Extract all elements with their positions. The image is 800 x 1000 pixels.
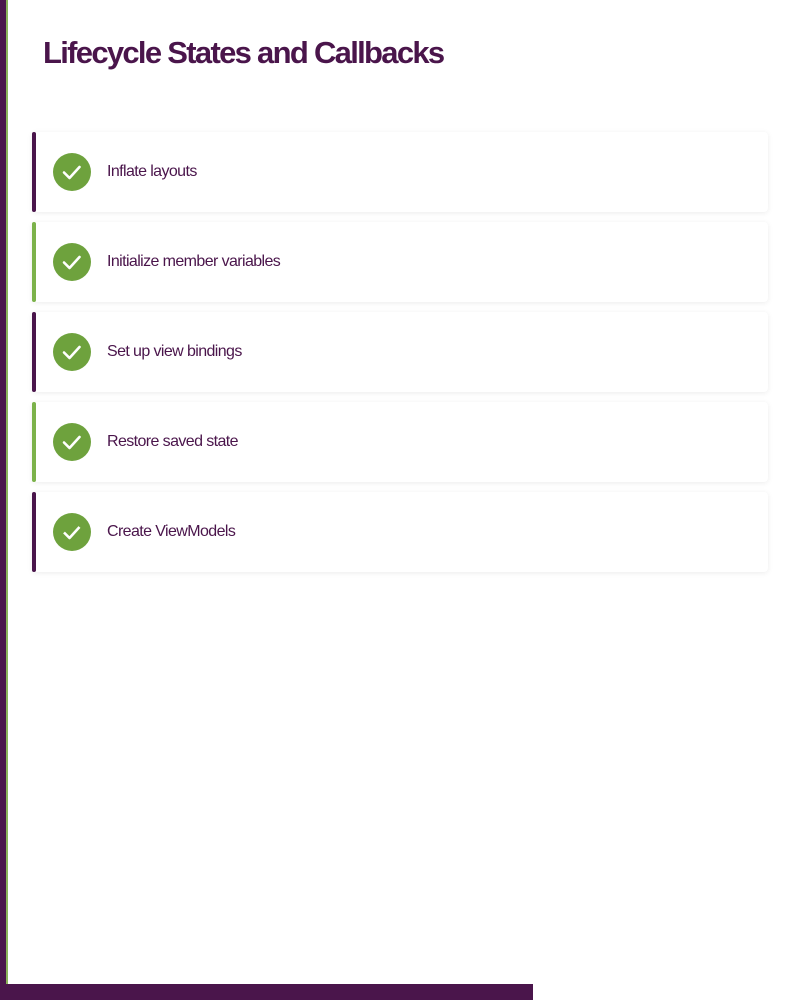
icon: check bbox=[53, 243, 91, 281]
card: Create ViewModels: Create ViewModels bbox=[107, 523, 235, 540]
card: Set up view bindings: Set up view bindings bbox=[107, 343, 242, 360]
icon: check bbox=[53, 513, 91, 551]
title: Lifecycle States and Callbacks bbox=[43, 35, 443, 70]
card: Inflate layouts bbox=[32, 132, 768, 212]
card: Restore saved state bbox=[32, 402, 768, 482]
icon: check bbox=[53, 153, 91, 191]
card: Inflate layouts: Inflate layouts bbox=[107, 163, 197, 180]
bottom bar bbox=[0, 984, 533, 1000]
icon: check bbox=[53, 333, 91, 371]
card: Set up view bindings bbox=[32, 312, 768, 392]
card: Initialize member variables: Initialize member variables bbox=[107, 253, 280, 270]
card: Restore saved state: Restore saved state bbox=[107, 433, 238, 450]
card: Initialize member variables bbox=[32, 222, 768, 302]
card: Create ViewModels bbox=[32, 492, 768, 572]
icon: check bbox=[53, 423, 91, 461]
